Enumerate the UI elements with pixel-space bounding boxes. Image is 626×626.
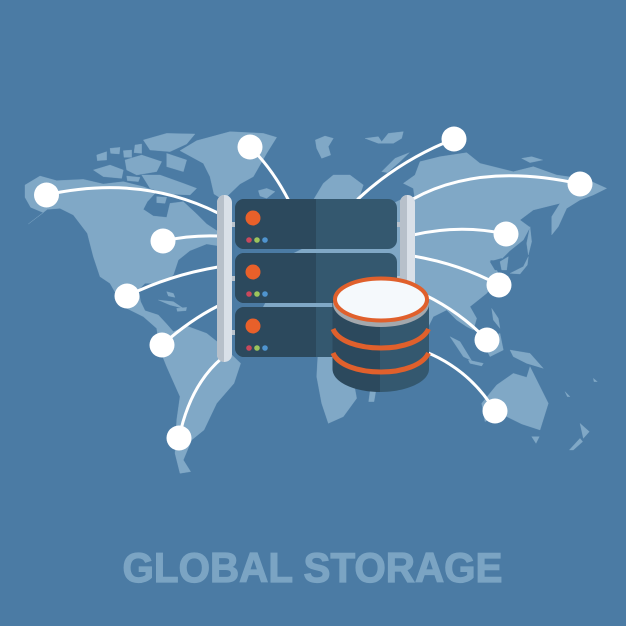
map: Iceland [258, 188, 275, 198]
map: Franz Josef islands [365, 132, 403, 143]
map: Korea [490, 258, 503, 270]
map: Greenland [180, 132, 277, 200]
map: Tasmania [532, 437, 539, 443]
map: New Zealand [580, 423, 589, 438]
cylinder body [332, 300, 380, 392]
map: Arctic islands [93, 133, 197, 203]
server unit 1 [235, 199, 397, 249]
network connection lines [46, 139, 580, 438]
map: the Americas [25, 132, 277, 473]
map: Novaya islands [522, 157, 543, 163]
gray rim [333, 281, 429, 327]
server rack [217, 195, 415, 362]
rack connectors [232, 222, 401, 335]
database cylinder [332, 278, 429, 392]
world map [25, 132, 607, 473]
map: Caribbean islands [158, 292, 187, 311]
map: New Guinea [510, 350, 543, 368]
server unit 2 [235, 253, 397, 303]
map: Sumatra [450, 337, 472, 361]
map: Borneo [482, 333, 503, 357]
network nodes [34, 126, 592, 450]
right pillar [400, 195, 415, 362]
map: Novaya Zemlya [382, 153, 409, 173]
map: Svalbard [315, 136, 333, 158]
cylinder top [335, 278, 427, 320]
map: Eurasia and Africa [263, 132, 607, 450]
map: Java [468, 360, 483, 366]
left pillar [217, 195, 232, 362]
map: Madagascar [369, 390, 376, 402]
map: Philippines and Taiwan [492, 308, 500, 328]
title: GLOBAL STORAGE [122, 544, 502, 591]
server unit 3 [235, 307, 397, 357]
map: Pacific islands [565, 392, 570, 397]
map: Australia [482, 367, 548, 430]
map: Japan [510, 257, 528, 274]
map: Africa south [317, 347, 358, 423]
orange bands [333, 329, 428, 348]
